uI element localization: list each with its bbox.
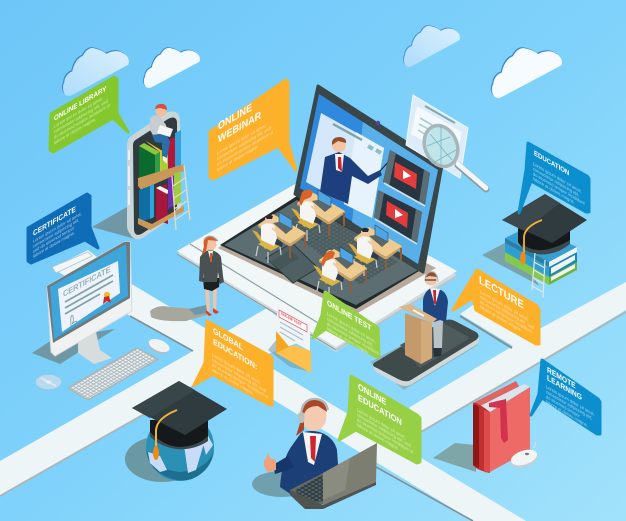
student at desk 2 [291, 190, 345, 241]
laptop base [218, 196, 436, 314]
body text: labore et dolore magna. [217, 143, 259, 173]
graduation cap on books [482, 194, 587, 298]
hair: student 4 [361, 228, 369, 232]
body text: consectetur adipiscing elit, sed [357, 412, 411, 448]
phone bookshelf with person [92, 104, 190, 239]
bubble: certificate [28, 194, 98, 263]
video panel 2 [374, 190, 422, 244]
body text: do eiusmod tempor incididunt ut [54, 102, 111, 140]
laptop screen [295, 86, 442, 272]
body text [546, 384, 595, 432]
wooden shelf [138, 164, 184, 190]
body text [33, 211, 82, 259]
ladder [172, 165, 190, 230]
body text: labore et dolore magna. [327, 326, 369, 355]
bubble: online education [339, 376, 420, 463]
books on upper shelf [139, 130, 181, 183]
body text [327, 311, 379, 361]
title: remote learning: REMOTE [547, 365, 576, 391]
body text: Lorem ipsum dolor sit amet, [480, 289, 529, 322]
student at desk 1 [252, 212, 306, 263]
title: online library: ONLINE LIBRARY [54, 84, 107, 123]
graduation cap on globe [125, 381, 227, 482]
body text: do eiusmod tempor [546, 394, 580, 419]
bubble: remote learning: LEARNING [547, 373, 582, 402]
podium [399, 304, 437, 364]
body text: labore et dolore magna. [546, 399, 588, 428]
touchpad [266, 243, 318, 283]
globe [146, 413, 214, 481]
body text: Lorem ipsum dolor sit amet, [212, 352, 261, 385]
ladder [532, 253, 545, 298]
online test envelope [268, 306, 311, 373]
body text: do eiusmod tempor incididunt ut [357, 417, 414, 455]
cloud: left white [143, 47, 200, 88]
body text: labore et dolore magna. [357, 422, 399, 451]
body text: labore et dolore magna. [480, 304, 522, 333]
books on lower shelf [139, 171, 181, 224]
bottom woman with laptop [252, 399, 377, 509]
title: online test: ONLINE TEST [327, 298, 371, 333]
monitor [47, 242, 132, 356]
body text [217, 118, 274, 173]
cloud: top centre [403, 25, 460, 67]
body text: Lorem ipsum dolor sit amet, [217, 123, 266, 156]
teacher [320, 137, 392, 204]
cloud: far left [62, 47, 129, 96]
title: online education: ONLINE [358, 381, 386, 408]
bubble: education [519, 143, 589, 213]
body text: do eiusmod tempor incididunt [480, 299, 532, 334]
laptop platform [177, 183, 457, 352]
bubble: online webinar: WEBINAR [218, 110, 262, 146]
body text: do eiusmod tempor incididunt [533, 171, 585, 206]
title: online webinar: ONLINE [218, 102, 252, 133]
hair: student 2 [299, 190, 313, 206]
body text: consectetur adipiscing elit, [533, 166, 579, 198]
body text: consectetur adipiscing elit, sed [212, 357, 266, 393]
title: certificate: CERTIFICATE [33, 204, 76, 238]
bookmark ribbon [489, 399, 508, 443]
road: upper-left to bottom [52, 250, 526, 521]
tassel [524, 220, 542, 255]
body text: do eiusmod tempor incididunt ut [212, 362, 269, 400]
road stub behind monitor [52, 252, 92, 273]
bubble: remote learning [531, 360, 600, 434]
body text: Lorem ipsum dolor sit amet, [327, 311, 376, 344]
certificate paper: CERTIFICATE [63, 263, 111, 299]
body text: Lorem ipsum dolor sit amet, [546, 384, 595, 417]
roads [0, 250, 626, 521]
body text: do eiusmod tempor incididunt ut [217, 129, 274, 167]
body text: do eiusmod tempor incididunt [327, 321, 379, 356]
cloud: right white [491, 47, 562, 98]
bubble: online test [313, 292, 379, 361]
reading person [150, 104, 173, 164]
body text: labore et dolore magna. [54, 116, 96, 146]
title: global education: GLOBAL [213, 326, 243, 353]
body text: Lorem ipsum dolor sit amet, [54, 96, 103, 129]
CD disc [36, 374, 62, 390]
stacked books [505, 226, 577, 285]
cap skirt [150, 420, 208, 449]
body text: consectetur adipiscing elit, [546, 389, 592, 421]
bubble: online education: EDUCATION [358, 392, 402, 427]
phone with lecturer at podium [370, 272, 479, 390]
lecture platform [460, 300, 541, 348]
body text: labore et dolore magna. [33, 230, 75, 259]
bubble: global education [194, 321, 272, 405]
tassel [156, 410, 177, 452]
mouse [146, 336, 171, 357]
student at desk 4 [348, 225, 402, 276]
girl with headset [150, 236, 224, 321]
body text: consectetur adipiscing elit, sed [54, 98, 108, 135]
body text: Lorem ipsum dolor sit amet, [357, 407, 406, 440]
hair: student 1 [265, 215, 273, 219]
body text [54, 91, 111, 146]
white mouse [508, 442, 540, 471]
student at desk 3 [313, 247, 367, 298]
body text: sed do eiusmod tempor [33, 225, 75, 254]
title: lecture: LECTURE [479, 274, 524, 312]
hair: student 3 [321, 251, 335, 267]
body text [480, 289, 534, 340]
laptop [28, 77, 600, 509]
body text: Lorem ipsum dolor sit amet, [533, 161, 582, 194]
body text: labore et dolore magna. [212, 367, 254, 396]
body text: consectetur adipiscing elit, sed [480, 294, 534, 330]
desktop computer with certificate [32, 242, 132, 364]
monitor stand [78, 332, 112, 364]
red book with mouse [433, 381, 540, 473]
bubble: online library [50, 77, 128, 152]
presentation slide [306, 113, 384, 218]
body text: consectetur adipiscing elit, sed [217, 125, 271, 162]
cap board [132, 381, 227, 435]
road: up-right to right edge [397, 282, 626, 446]
title: education: EDUCATION [534, 150, 569, 178]
cap skirt [518, 228, 570, 254]
magnifier [418, 121, 486, 189]
cap board [502, 194, 587, 243]
road: lower-left to platform [0, 308, 305, 496]
bubble: global education: EDUCATION: [213, 337, 257, 372]
keyboard [282, 205, 398, 285]
body text: Lorem ipsum dolor sit amet, [33, 211, 82, 244]
body text: labore et dolore magna. [533, 176, 575, 205]
bubble: lecture [453, 270, 539, 344]
keyboard [68, 348, 158, 400]
online test envelope: ONLINE TEST [281, 311, 302, 328]
body text [533, 161, 585, 211]
lecturer [423, 272, 448, 357]
video panel 1 [383, 150, 430, 206]
bottom shelf [138, 206, 184, 230]
thumbs-up hand [264, 452, 276, 472]
body text: consectetur adipiscing elit, [33, 217, 79, 249]
bottom laptop [290, 443, 377, 509]
bubble: online webinar [210, 80, 296, 179]
body text: consectetur adipiscing elit, [327, 316, 373, 348]
web document with magnifier [406, 95, 486, 189]
